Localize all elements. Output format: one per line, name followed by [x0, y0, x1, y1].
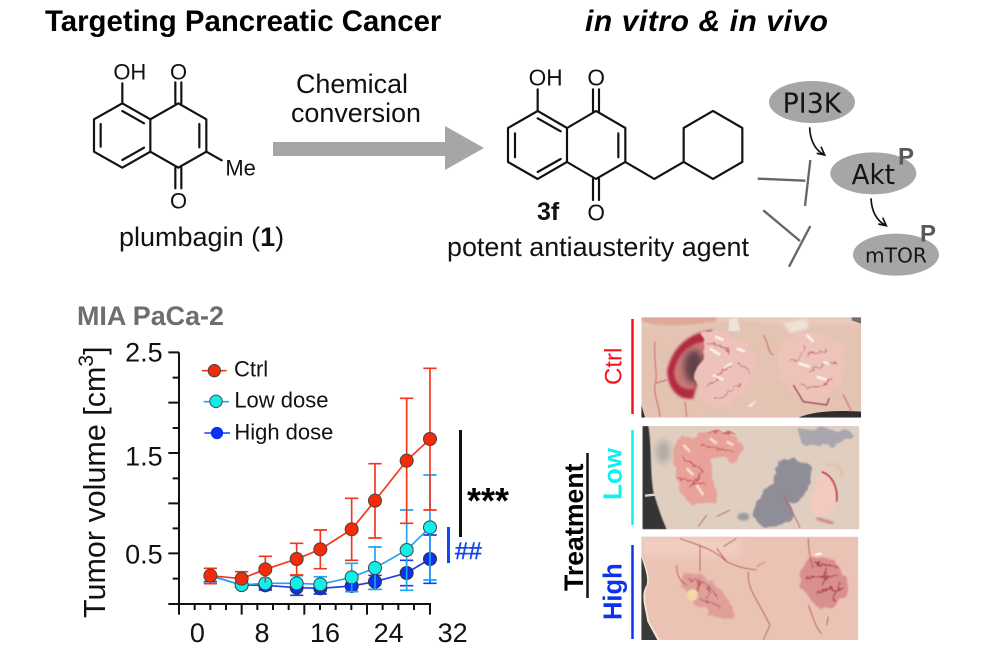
significance: ##: ## [455, 538, 482, 565]
arrow: Akt to mTOR [871, 198, 886, 226]
molecule: plumbagin: OH [113, 59, 146, 84]
title: Targeting Pancreatic Cancer: Targeting Pancreatic Cancer [45, 5, 441, 38]
axes [168, 352, 431, 615]
legend: Low dose [234, 388, 328, 413]
y tick labels: 2.5 [125, 337, 163, 367]
y axis title: 3 [75, 355, 98, 367]
legend [202, 357, 333, 445]
significance bar: blue [447, 527, 450, 563]
node: mTOR [853, 220, 939, 276]
y tick labels [125, 337, 163, 569]
x tick labels: 24 [374, 618, 404, 648]
group label: Ctrl [600, 319, 632, 414]
legend: Ctrl [234, 357, 268, 382]
arrow: PI3K to Akt [810, 127, 825, 155]
label: potent antiausterity agent: potent antiausterity agent [447, 232, 750, 262]
photos [641, 315, 861, 640]
y axis title: Tumor volume [cm [78, 367, 112, 618]
group label: Ctrl: Ctrl [600, 348, 628, 385]
photo: control tumors [641, 315, 861, 418]
node: Akt: Akt [852, 160, 895, 191]
series: high dose [204, 535, 437, 595]
molecule: compound 3f [508, 64, 742, 226]
molecule: compound 3f: OH [529, 64, 563, 90]
inhibition: to mTOR [763, 210, 810, 267]
line chart: tumor volume [125, 337, 468, 648]
node: mTOR: P [920, 220, 936, 247]
x tick labels: 0 [190, 618, 205, 648]
photo: low dose tumors [642, 426, 859, 529]
node: Akt [830, 143, 916, 194]
y tick labels: 1.5 [125, 442, 163, 472]
x tick labels: 16 [310, 618, 340, 648]
treatment label: Treatment [559, 463, 589, 591]
molecule: compound 3f: O [587, 200, 605, 226]
series: low dose [210, 475, 437, 592]
group label: Low [598, 430, 632, 525]
molecule: plumbagin [94, 59, 256, 213]
label: 3f: 3f [537, 198, 560, 226]
y axis title: ] [78, 346, 112, 355]
label: plumbagin (1): plumbagin (1) [119, 222, 284, 252]
chart heading: MIA PaCa-2: MIA PaCa-2 [77, 301, 224, 331]
group label: High [600, 545, 632, 639]
group label: Low: Low [598, 447, 628, 500]
molecule: compound 3f: O [587, 64, 605, 90]
molecule: plumbagin: Me [225, 156, 256, 181]
node: PI3K: PI3K [783, 88, 842, 119]
node: PI3K [769, 81, 855, 123]
photo: high dose tumors [641, 537, 858, 640]
arrow: chemical conversion [273, 126, 484, 170]
inhibition: to PI3K/Akt [758, 160, 810, 206]
significance: ***: *** [467, 480, 509, 521]
label: Chemical conversion: conversion [291, 98, 421, 128]
legend: High dose [234, 420, 333, 445]
node: Akt: P [898, 143, 914, 170]
x tick labels: 32 [438, 618, 468, 648]
x tick labels [190, 618, 468, 648]
x tick labels: 8 [254, 618, 270, 648]
group label: High: High [600, 563, 628, 620]
y tick labels: 0.5 [125, 539, 163, 569]
series: control [204, 368, 437, 585]
node: mTOR: mTOR [865, 244, 927, 268]
molecule: plumbagin: O [170, 188, 187, 213]
significance bar: black [459, 430, 462, 537]
pathway: PI3K Akt mTOR [758, 81, 939, 276]
label: Chemical conversion: Chemical [296, 69, 408, 99]
molecule: plumbagin: O [170, 59, 187, 84]
label: Chemical conversion [291, 69, 421, 128]
title: in vitro & in vivo: in vitro & in vivo [585, 5, 828, 38]
